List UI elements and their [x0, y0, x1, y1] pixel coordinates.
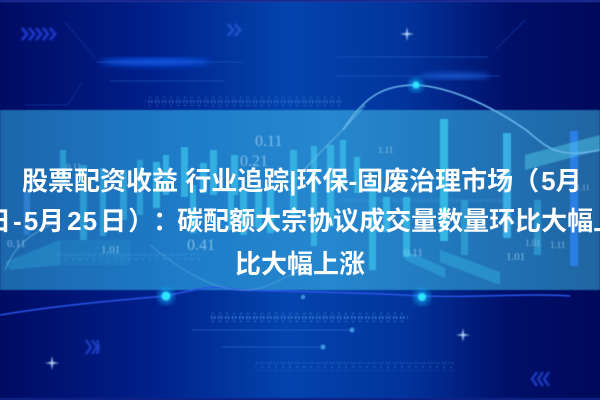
chart number labels: 1.01 — [101, 244, 120, 256]
title line 3: 比大幅上涨 — [235, 249, 365, 279]
bottom sparkles — [45, 328, 470, 370]
left bars — [24, 150, 143, 240]
curved trend lines — [0, 85, 600, 315]
band faint dashed strips — [55, 198, 510, 261]
chart number labels: 1.01 — [506, 251, 525, 263]
bottom lines and dots — [192, 295, 455, 371]
chart number labels: 0.11 — [66, 162, 81, 172]
chart number labels: 0.21 — [240, 153, 268, 170]
decoration: top sparkle — [400, 27, 414, 41]
chart number labels: 1.11 — [576, 183, 590, 192]
3D slanted planes — [5, 135, 600, 285]
decoration: top chevrons — [22, 24, 240, 40]
title line 1: 股票配资收益 行业追踪|环保-固废治理市场（5月 — [22, 166, 582, 196]
chart number labels: 0.11 — [7, 238, 26, 250]
chart number labels: 1.01 — [525, 238, 541, 248]
chart number labels: 1.11 — [550, 240, 565, 250]
decoration: top dot rows — [145, 97, 341, 106]
chart number labels: 0.11 — [404, 247, 423, 259]
glowing nodes — [158, 78, 430, 305]
chart number labels: 1.11 — [378, 145, 393, 155]
decoration: top glow streaks — [100, 58, 490, 78]
light translucent band — [0, 110, 600, 290]
chart number labels: 0.11 — [255, 133, 282, 150]
bar chart — [24, 119, 578, 270]
chart number labels: 0.41 — [187, 237, 215, 254]
bottom chevrons — [86, 340, 549, 386]
chart number labels — [7, 133, 590, 263]
